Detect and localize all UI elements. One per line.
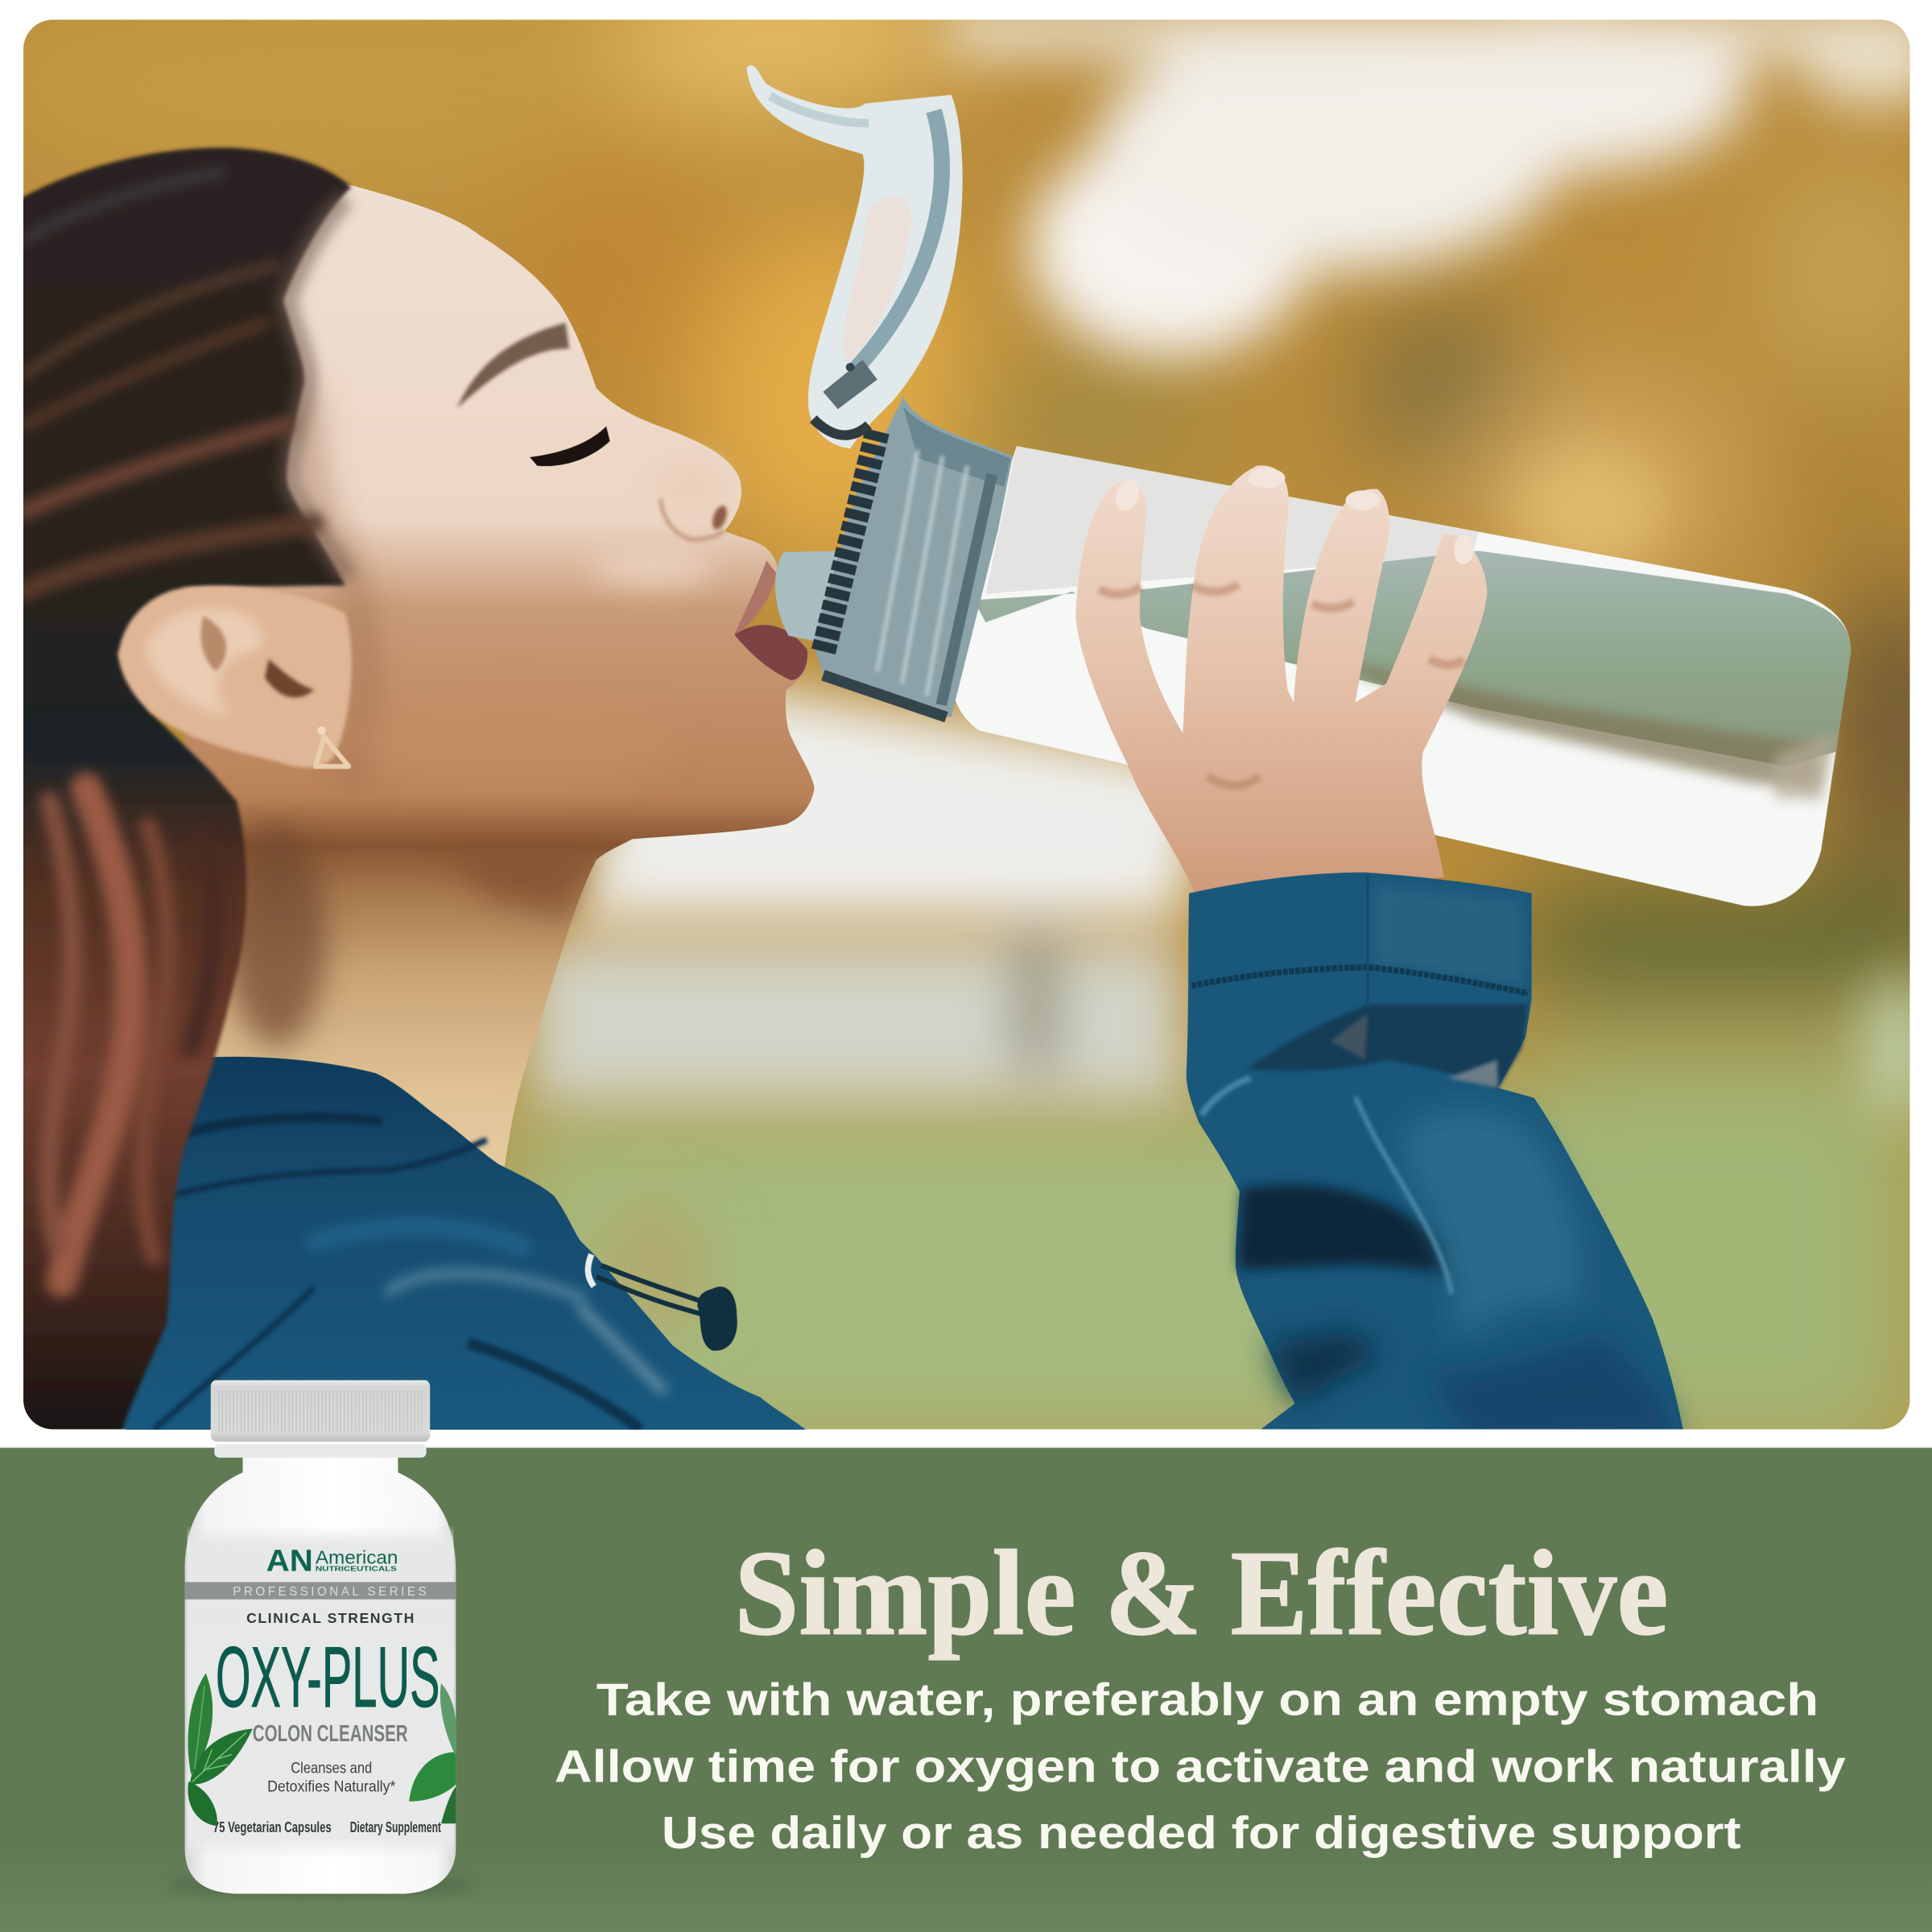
usage instructions: Take with water, preferably on an empty stomach — [597, 1675, 1818, 1726]
brand logo: American — [316, 1546, 398, 1567]
brand logo — [266, 1544, 398, 1579]
nostril — [709, 504, 729, 531]
brand logo: NUTRICEUTICALS — [316, 1565, 397, 1573]
nose detail — [660, 499, 724, 539]
blurred autumn background — [0, 0, 1932, 1466]
hair strands, upper — [23, 172, 314, 592]
mint leaves, right — [409, 1683, 456, 1823]
skin shading — [228, 394, 724, 1047]
bottle mouthpiece — [775, 551, 850, 643]
capsule count and supplement line: 75 Vegetarian Capsules — [213, 1818, 332, 1835]
ear — [118, 586, 352, 767]
mint leaves, left — [188, 1674, 253, 1826]
capsule count and supplement line: Dietary Supplement — [350, 1818, 441, 1835]
product claim: Detoxifies Naturally* — [267, 1779, 396, 1796]
usage instructions — [555, 1675, 1846, 1859]
brand logo: AN — [266, 1544, 313, 1579]
earring — [316, 726, 349, 766]
yellow hair wisps near shoulder — [602, 1209, 707, 1331]
soft hairline — [286, 197, 348, 579]
bottle collar — [813, 397, 1013, 717]
photo panel: woman drinking from a water bottle — [0, 0, 1932, 1466]
woman's face and neck — [185, 172, 815, 1170]
usage instructions: Use daily or as needed for digestive support — [662, 1808, 1741, 1859]
green information band — [0, 1447, 1932, 1932]
hair strands, lower — [49, 789, 214, 1282]
jacket: hood and shoulder — [111, 1057, 819, 1442]
eyebrow — [457, 323, 569, 408]
jacket drawcord and toggle — [588, 1254, 737, 1351]
bottle label panel — [188, 1525, 453, 1858]
bottle shadow — [167, 1876, 474, 1895]
professional series stripe — [185, 1582, 456, 1600]
hand gripping the bottle — [1075, 465, 1487, 894]
jacket sleeve — [1187, 873, 1686, 1442]
product descriptor: COLON CLEANSER — [253, 1721, 408, 1747]
water bottle body — [950, 446, 1851, 906]
lips — [734, 560, 776, 634]
hair — [12, 147, 351, 1442]
bottle cap — [211, 1380, 430, 1458]
product claim: Cleanses and — [291, 1761, 372, 1777]
closed eye lashes — [530, 427, 610, 466]
product bottle — [167, 1380, 474, 1895]
product name: OXY-PLUS — [216, 1629, 440, 1725]
bottle body — [185, 1456, 456, 1894]
heading: Simple & Effective — [734, 1525, 1668, 1661]
clinical strength line: CLINICAL STRENGTH — [246, 1610, 414, 1626]
cuff stitched seam — [1191, 968, 1528, 993]
usage instructions: Allow time for oxygen to activate and work naturally — [555, 1741, 1846, 1792]
professional series stripe: PROFESSIONAL SERIES — [233, 1585, 427, 1599]
flip-up bottle handle — [747, 65, 963, 448]
product claim — [267, 1761, 396, 1796]
